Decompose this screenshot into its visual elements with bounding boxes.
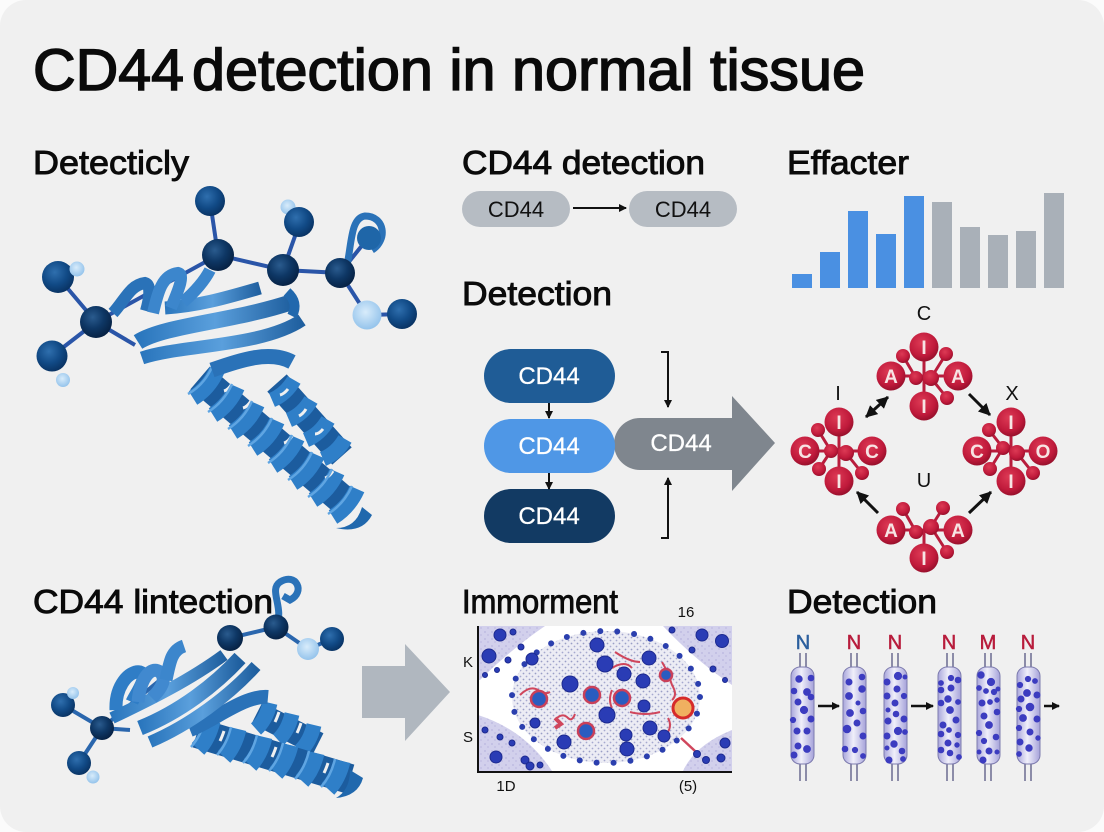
axis label 1D: 1D <box>496 778 516 795</box>
molecule left: I <box>836 472 842 493</box>
molecule right: C <box>970 442 984 463</box>
axes <box>478 626 732 772</box>
molecule top: I <box>921 338 927 359</box>
wires <box>800 653 1031 781</box>
axis label K: K <box>463 654 473 671</box>
CD44 to CD44 pills <box>462 191 737 227</box>
molecule right: I <box>1008 413 1014 434</box>
nuclei <box>482 627 730 770</box>
molecule left <box>790 408 886 496</box>
top loop <box>346 216 382 270</box>
tube letters <box>796 632 1035 654</box>
corner tissue patches <box>478 626 732 771</box>
red filaments <box>520 652 695 751</box>
tube letters: M <box>980 632 996 654</box>
flow diagram: CD44 stack into arrow: CD44 <box>518 363 580 390</box>
bar chart <box>792 193 1064 288</box>
large grey arrow <box>614 396 775 491</box>
label X: X <box>1005 383 1019 405</box>
heading: Immorment: Immorment <box>462 583 618 620</box>
molecule top <box>876 332 972 420</box>
tube bodies <box>791 667 1040 764</box>
label U: U <box>917 470 931 492</box>
title: detection in normal tissue <box>192 38 865 103</box>
molecule bottom: I <box>921 549 927 570</box>
tube letters: N <box>942 632 956 654</box>
central cell cluster <box>512 631 700 763</box>
tubes diagram <box>790 632 1059 781</box>
molecule cycle diagram <box>790 303 1058 572</box>
pill: light blue <box>484 419 615 473</box>
tube letters: N <box>1021 632 1035 654</box>
molecule bottom <box>876 501 972 572</box>
molecule bottom: A <box>884 521 898 542</box>
helix A <box>188 367 357 517</box>
axis label 16: 16 <box>678 604 694 621</box>
pill: dark blue <box>484 349 615 403</box>
helix B <box>272 380 345 459</box>
heading: Detecticly: Detecticly <box>33 144 190 181</box>
heading: CD44 lintection: CD44 lintection <box>33 583 273 620</box>
bonds <box>63 627 332 763</box>
flow diagram: CD44 stack into arrow <box>484 349 775 543</box>
flow diagram: CD44 stack into arrow: CD44 <box>518 433 580 460</box>
flow diagram: CD44 stack into arrow: CD44 <box>518 503 580 530</box>
ringed nuclei <box>531 669 672 739</box>
tube arrows <box>818 705 1059 707</box>
upper helix <box>113 270 210 313</box>
axis label S: S <box>463 729 473 746</box>
heading: Effacter: Effacter <box>787 144 909 181</box>
ribbon tail <box>336 770 363 798</box>
beta sheet strands <box>138 288 302 370</box>
pill: navy <box>484 489 615 543</box>
heading: Detection (bottom right): Detection <box>787 583 937 620</box>
CD44 to CD44 pills: CD44 <box>655 197 711 222</box>
tube letters: N <box>796 632 810 654</box>
axis label (5): (5) <box>679 778 697 795</box>
helix A <box>191 719 350 789</box>
molecule left: I <box>836 413 842 434</box>
helix B <box>256 703 318 751</box>
atoms <box>51 693 75 717</box>
protein structure: small ribbon and atoms <box>51 579 363 798</box>
molecule top: A <box>884 367 898 388</box>
molecule right: O <box>1036 442 1050 463</box>
connector arrows <box>549 352 668 538</box>
tube letters: N <box>888 632 902 654</box>
highlighted red-orange cell <box>673 698 693 718</box>
upper helix <box>116 646 184 710</box>
protein structure: large ribbon and atoms <box>36 186 417 529</box>
top loop <box>276 579 298 627</box>
tissue micrograph panel <box>463 604 732 795</box>
label I: I <box>835 383 841 405</box>
CD44 to CD44 pills: CD44 <box>488 197 544 222</box>
molecule left: C <box>798 442 812 463</box>
heading: CD44 detection: CD44 detection <box>462 144 705 181</box>
ribbon tail <box>336 507 372 529</box>
molecule right: I <box>1008 472 1014 493</box>
molecule bottom: A <box>951 521 965 542</box>
flow diagram: CD44 stack into arrow: CD44 <box>650 430 712 457</box>
tube letters: N <box>847 632 861 654</box>
grey arrow <box>362 644 450 741</box>
heading: Detection (middle): Detection <box>462 275 612 312</box>
atoms <box>195 186 225 216</box>
beta strands <box>112 655 268 742</box>
label C: C <box>917 303 931 325</box>
ball and stick bonds <box>52 201 402 356</box>
cycle arrows <box>857 394 991 513</box>
title: CD44 <box>33 38 184 103</box>
tube dots <box>790 672 1040 763</box>
molecule top: A <box>951 367 965 388</box>
molecule left: C <box>865 442 879 463</box>
molecule right <box>962 408 1058 496</box>
micrograph background <box>478 626 732 772</box>
molecule top: I <box>921 397 927 418</box>
